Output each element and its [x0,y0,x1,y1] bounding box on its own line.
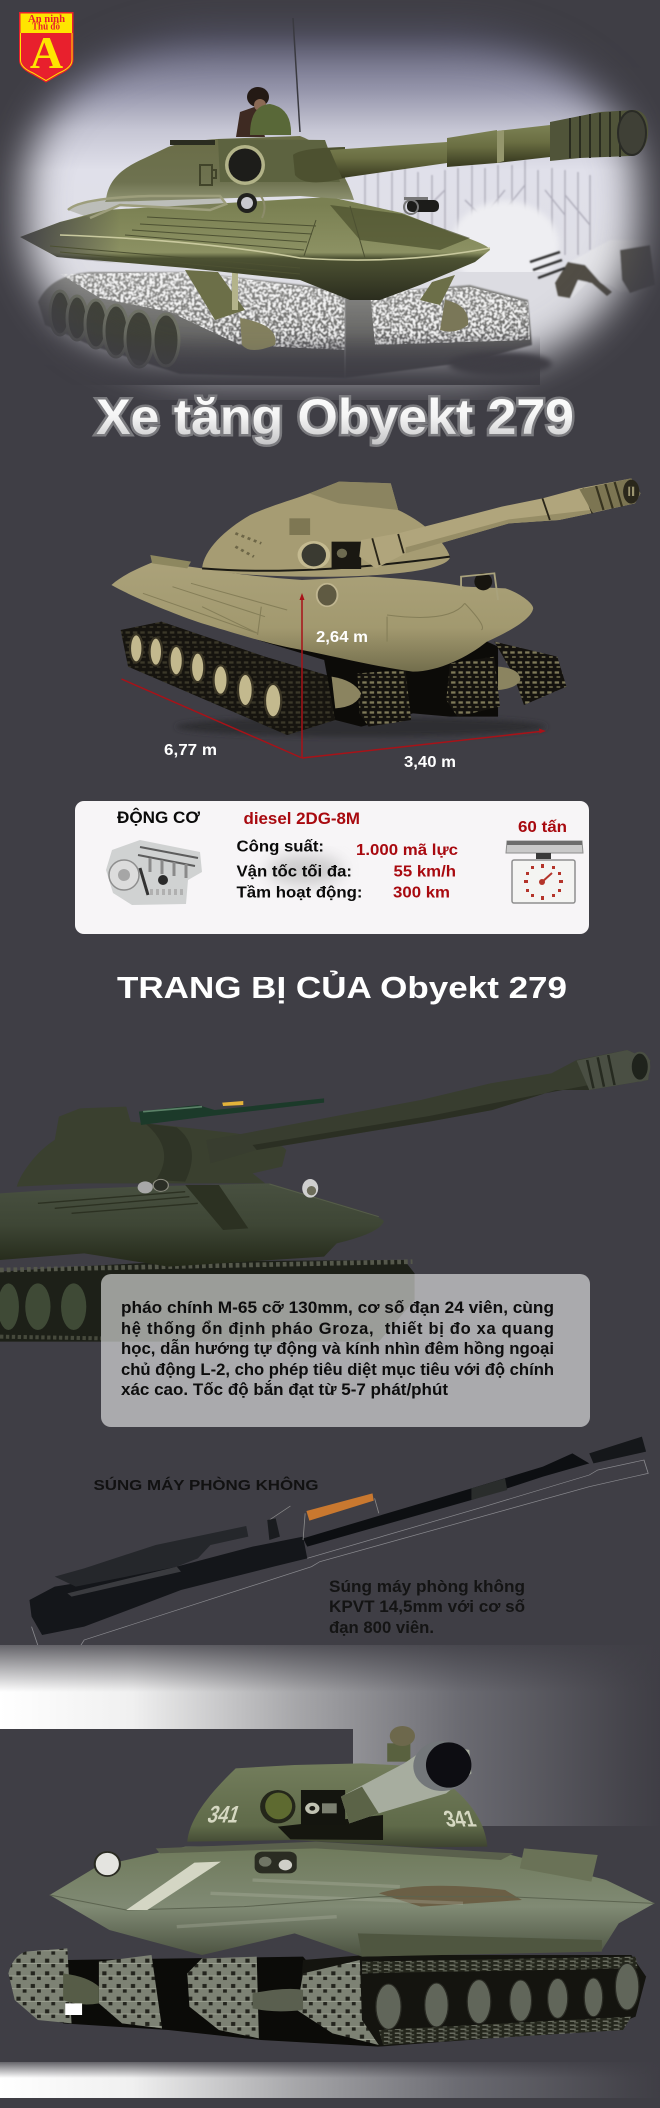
flash hider [589,1437,646,1463]
panel: main gun description [101,1274,590,1427]
gradient band: lower [0,2062,660,2098]
side track [299,1955,646,2047]
description text: hệ thống ổn định pháo Groza, thiết bị đo xa quang [121,1320,554,1338]
speed value: 55 km/h [394,864,456,880]
turret [202,482,450,577]
rear track [121,622,335,735]
sight hatch [260,1790,295,1823]
barrel [206,1050,650,1163]
turret numbers: 341 [205,1801,243,1828]
hull front shadow [330,205,470,250]
mounted machine gun [139,1098,324,1125]
height arrow [301,597,303,758]
right light [302,1179,318,1198]
wrecked vehicle in snow [530,240,655,298]
height arrowhead [300,593,304,600]
tank 2 drawing [111,478,640,737]
suspension arms [185,270,468,350]
under-shadow [63,1957,379,2047]
panel background [75,801,589,934]
top cover [55,1526,248,1587]
logo: An ninh Thủ đô shield [20,12,73,82]
weight value: 60 tấn [518,819,567,836]
machine gun description: Súng máy phòng không [329,1578,525,1596]
machine gun description: KPVT 14,5mm với cơ số [329,1598,525,1616]
vignette scene background [0,0,660,400]
receiver body [29,1537,307,1635]
power value: 1.000 mã lực [356,842,458,859]
icon: weighing scale [506,841,583,903]
power label: Công suất: [236,838,324,856]
logo: An ninh Thủ đô shield: A [30,27,63,78]
length line [122,679,302,758]
hull deck lines [50,206,365,274]
description text: chủ động L-2, cho phép tiêu diệt mục tiêu với độ chính [121,1361,554,1379]
machine gun description: đạn 800 viên. [329,1619,434,1637]
hero illustration: tank in winter landscape [0,0,660,400]
width arrowhead [539,728,546,734]
logo: An ninh Thủ đô shield: Thủ đô [32,22,60,32]
ghost outline [32,1460,648,1652]
shadow [176,717,546,737]
title: Xe tăng Obyekt 279 [96,389,574,445]
turret details [150,482,498,606]
range value: 300 km [393,884,450,902]
bottom tank photo [8,1726,654,2047]
width arrow [302,732,540,758]
tank 3 drawing [0,1050,650,1342]
label: length: 6,77 m [164,742,217,759]
description text: xác cao. Tốc độ bắn đạt từ 5-7 phát/phút [121,1380,449,1399]
label: machine gun heading: SÚNG MÁY PHÒNG KHÔNG [94,1476,318,1494]
hull [50,1845,654,1957]
main gun [293,110,648,182]
left headlight [95,1852,120,1876]
description text: pháo chính M-65 cỡ 130mm, cơ số đạn 24 viên, cùng [121,1299,554,1317]
label: height: 2,64 m [316,629,368,646]
commander and cupola [236,87,291,137]
front track segments [332,642,566,727]
description text: học, dẫn hướng tự động và kính nhìn đêm hồng ngoại [121,1339,554,1358]
machine gun drawing [29,1437,648,1652]
icon: engine [106,840,202,905]
heading: equipment: TRANG BỊ CỦA Obyekt 279 [117,969,567,1005]
hull highlight edge [60,235,490,260]
soft shadow blotch [267,855,343,885]
section: main gun tank [0,1050,650,1342]
tracks [0,1260,415,1342]
headlights [138,1179,168,1193]
description text [121,1299,554,1399]
engine label: ĐỘNG CƠ [117,808,201,827]
searchlight right [404,197,439,214]
turret numbers right: 341 [440,1806,479,1832]
searchlight left [237,193,265,218]
carrying handle [306,1493,374,1521]
gun [341,1743,471,1823]
hull left fade [20,208,120,264]
snowy track: rear [38,272,345,378]
center lights [255,1852,297,1873]
top optic [387,1726,415,1762]
logo: An ninh Thủ đô shield: An ninh [28,14,65,25]
speed label: Vận tốc tối đa: [236,864,352,880]
translucent box [101,1274,590,1427]
white hull stripe [126,1862,221,1910]
road wheels [50,291,179,367]
wheels [130,634,281,717]
range label: Tầm hoạt động: [236,884,362,902]
tank hull [20,197,490,300]
barrel [303,1453,589,1547]
hull [111,562,533,672]
snowy track: front [345,285,532,378]
tank turret dome [105,136,354,202]
road wheels [376,1963,639,2029]
rear turret rail [68,196,226,218]
gun [359,478,640,568]
machine gun description [329,1578,525,1637]
front track segments [8,1948,379,2045]
ground shadow [448,352,552,376]
engine type: diesel 2DG-8M [244,810,360,828]
hull [0,1183,384,1267]
underside shadow [258,640,498,727]
dimensions tank: studio model [111,478,640,771]
turret [17,1107,286,1187]
mantlet box [301,1790,345,1825]
section: anti-aircraft machine gun [29,1437,648,1652]
turret detail [170,139,340,185]
gradient band: upper [0,1645,660,1826]
panel: engine specifications [75,801,589,934]
turret [187,1763,487,1847]
label: width: 3,40 m [404,754,456,771]
bottom fade [79,337,540,385]
antenna [293,18,300,132]
rear stowage basket [520,1848,598,1882]
